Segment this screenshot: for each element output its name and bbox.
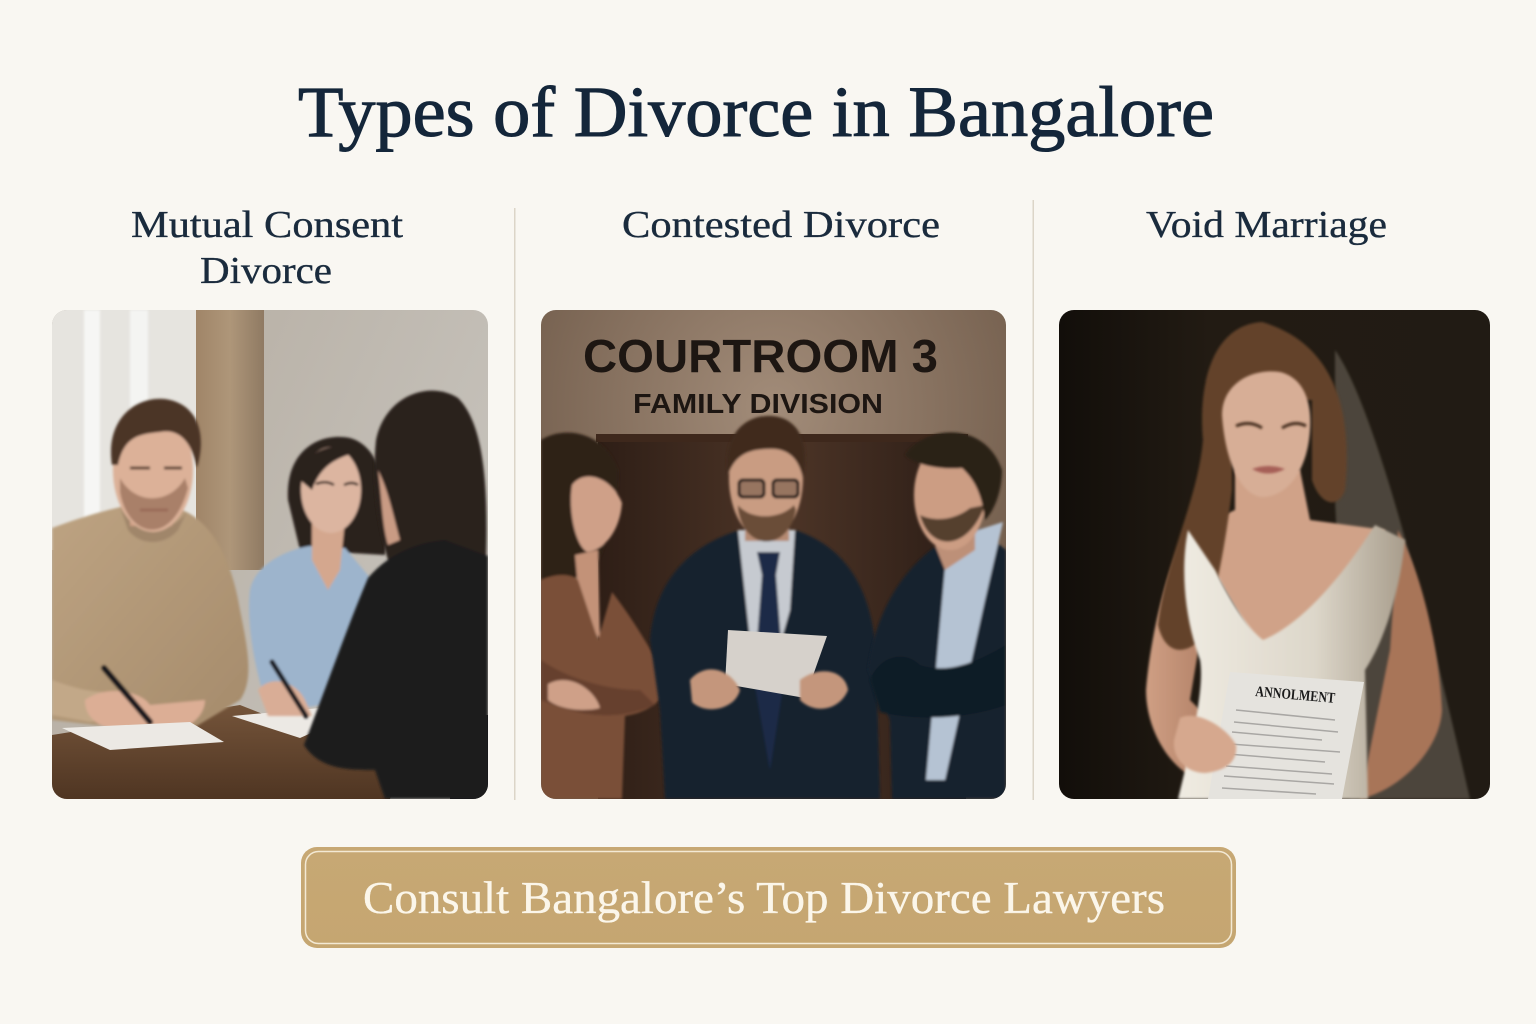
facial features bbox=[1236, 423, 1306, 474]
woman in blue blouse bbox=[249, 437, 387, 716]
heading: void marriage: Void Marriage bbox=[1146, 204, 1387, 246]
center man's hands bbox=[690, 669, 848, 709]
lace wedding dress bbox=[1178, 525, 1405, 799]
center man reading document bbox=[650, 416, 880, 799]
paper on table right bbox=[232, 708, 319, 738]
lawyer with back to camera bbox=[304, 391, 488, 799]
title: Types of Divorce in Bangalore bbox=[298, 72, 1214, 152]
face bbox=[1222, 371, 1310, 497]
arms bbox=[1144, 560, 1199, 774]
panel: void marriage photo illustration bbox=[1059, 310, 1490, 799]
window sheer curtain bbox=[52, 310, 198, 550]
dark chair bbox=[450, 715, 488, 799]
call to action button bbox=[301, 847, 1236, 948]
courtroom sign text bbox=[584, 340, 936, 414]
man in beige sweater bbox=[52, 399, 248, 730]
man's hands and pen bbox=[85, 691, 205, 730]
hand holding document bbox=[1174, 716, 1236, 773]
paper on table left bbox=[62, 722, 224, 750]
wooden door bbox=[598, 438, 966, 799]
document held by center man bbox=[725, 630, 827, 698]
chest and neck bbox=[1217, 469, 1386, 642]
brown drape bbox=[196, 310, 264, 570]
heading: mutual consent divorce: Mutual Consent bbox=[131, 204, 403, 246]
heading: mutual consent divorce bbox=[131, 204, 403, 292]
courtroom sign text: COURTROOM 3 bbox=[583, 330, 938, 382]
call to action button: Consult Bangalore’s Top Divorce Lawyers bbox=[363, 872, 1165, 923]
veil bbox=[1335, 350, 1470, 799]
long wavy hair bbox=[1158, 322, 1347, 650]
panel: mutual consent photo illustration bbox=[52, 310, 488, 799]
heading: contested divorce: Contested Divorce bbox=[622, 204, 940, 246]
document title: ANNOLMENT bbox=[1255, 684, 1336, 707]
heading: mutual consent divorce: Divorce bbox=[200, 250, 332, 292]
annulment document bbox=[1208, 672, 1364, 799]
right man with beard bbox=[868, 432, 1006, 799]
panel: courtroom photo illustration bbox=[541, 310, 1006, 799]
left woman with crossed arms bbox=[541, 433, 668, 799]
courtroom sign text: FAMILY DIVISION bbox=[633, 388, 883, 419]
table bbox=[52, 705, 400, 799]
